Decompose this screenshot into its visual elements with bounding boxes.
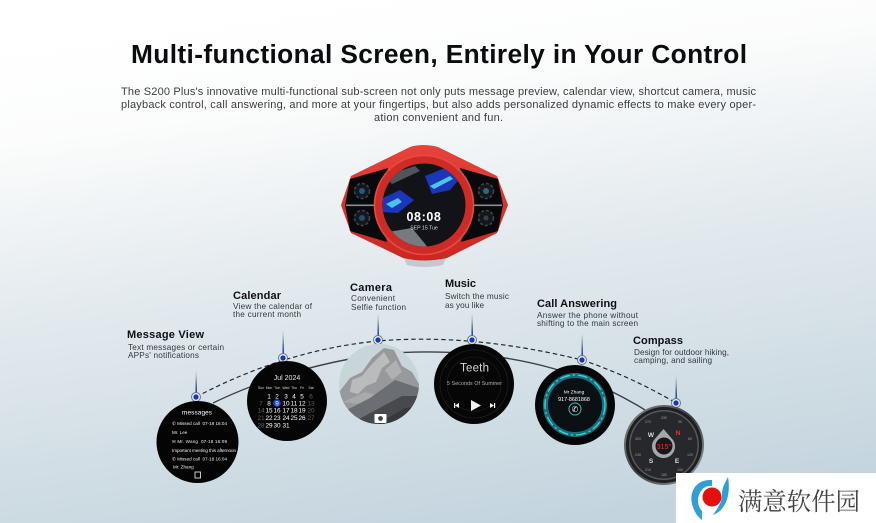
playback controls xyxy=(454,400,495,411)
watch face: compass: 30 xyxy=(678,420,682,424)
watch face: calendar: 9 xyxy=(275,400,279,408)
watch face: messages: Mr. Lee xyxy=(172,430,188,435)
watch face: calendar: Jul 2024 xyxy=(274,375,300,382)
watch face: calendar: Sat xyxy=(308,386,314,390)
watch face: compass: 150 xyxy=(677,468,683,472)
leader line xyxy=(196,370,197,397)
watch face: messages: messages xyxy=(182,410,212,416)
compass feature xyxy=(624,335,729,485)
watch face: calendar: 26 xyxy=(298,415,306,422)
music feature xyxy=(434,278,514,424)
watch face: calendar: 21 xyxy=(257,415,265,422)
music description: as you like xyxy=(445,301,484,310)
watch face: compass: 315° xyxy=(657,443,671,451)
right black panel xyxy=(460,168,503,242)
watch face: messages: ✆ Missed call 07-18 16:04 xyxy=(172,421,227,426)
camera description: Convenient xyxy=(351,294,396,303)
watch face: compass: E xyxy=(675,458,680,465)
intro text block xyxy=(121,86,756,124)
watch face: calendar: 4 xyxy=(292,394,296,400)
compass description xyxy=(634,348,729,365)
watch face: calendar: 22 xyxy=(265,415,273,422)
intro text block: ation convenient and fun. xyxy=(374,112,503,124)
watch face: calendar xyxy=(247,361,327,441)
leader line xyxy=(582,333,583,360)
watch face: calendar: 2 xyxy=(275,394,279,400)
music description xyxy=(445,292,509,310)
watch face: compass: 120 xyxy=(687,453,693,457)
watch face: calendar: 30 xyxy=(273,422,281,430)
message view description: APPs' notifications xyxy=(128,351,199,360)
leader line xyxy=(676,375,677,403)
intro text block: The S200 Plus's innovative multi-functional sub-screen not only puts message preview, calendar view, shortcut camera, music xyxy=(121,86,756,98)
anchor dot xyxy=(578,356,586,364)
watch face: calendar: 20 xyxy=(307,408,315,414)
watch face: calendar: 7 xyxy=(259,400,263,408)
watch face: calendar: 15 xyxy=(265,408,273,414)
watch face: compass: 210 xyxy=(645,468,651,472)
leader line xyxy=(282,330,284,358)
watch face: calendar: 16 xyxy=(273,408,281,414)
calendar description: the current month xyxy=(233,310,301,319)
watch face: calendar: 19 xyxy=(298,408,306,414)
watch face: compass: N xyxy=(676,430,681,437)
watch face: calendar: 24 xyxy=(282,415,290,422)
watch face: compass: 180 xyxy=(661,473,667,477)
watch face: calendar: 27 xyxy=(307,415,315,422)
call answering description: shifting to the main screen xyxy=(537,319,638,328)
watch face: calendar: 29 xyxy=(265,422,273,430)
camera shutter icon xyxy=(374,414,386,423)
compass description: Design for outdoor hiking, xyxy=(634,348,729,357)
watch face: calendar: 1 xyxy=(267,394,271,400)
button centers xyxy=(359,188,489,221)
watch face: calendar: Sun xyxy=(258,386,264,390)
buttons xyxy=(354,184,494,226)
watch face: calendar: 18 xyxy=(290,408,298,414)
calendar heading: Calendar xyxy=(233,290,282,302)
title: Multi-functional Screen, Entirely in Your Control xyxy=(131,39,747,69)
watch face: calendar: 23 xyxy=(273,415,281,422)
call answering description xyxy=(537,311,639,328)
call answering description: Answer the phone without xyxy=(537,311,639,320)
camera description xyxy=(351,294,406,312)
watch face: compass: S xyxy=(649,458,654,465)
music heading: Music xyxy=(445,278,476,290)
watch face: calendar: 13 xyxy=(307,400,315,408)
watch face: calendar: Thu xyxy=(291,386,297,390)
watch face: messages: ✆ Missed call 07-18 16:04 xyxy=(172,456,227,462)
device stand xyxy=(403,256,447,267)
device: red controller with sub-screen xyxy=(341,145,508,267)
watch face: messages: Important meeting this afternoon xyxy=(172,448,236,453)
watch face: compass: 240 xyxy=(635,453,641,457)
left black panel xyxy=(345,168,388,242)
watch face: vinyl music player: Teeth xyxy=(460,362,489,374)
watch face: compass: 270 xyxy=(645,420,651,424)
watch face: incoming call: ✆ xyxy=(572,405,579,414)
watch face: mountain photo xyxy=(339,344,419,424)
watch face: vinyl music player xyxy=(434,344,514,424)
call answering heading: Call Answering xyxy=(537,298,617,310)
calendar feature xyxy=(233,290,327,441)
message view description xyxy=(128,343,224,360)
watch face: compass: W xyxy=(648,432,655,439)
watch face: calendar: Wed xyxy=(283,386,290,390)
watch face: calendar: 8 xyxy=(267,400,271,408)
anchor dot xyxy=(672,398,680,408)
watch face: calendar: 6 xyxy=(309,394,313,400)
watch face: compass xyxy=(624,405,704,485)
watch face: calendar: Tue xyxy=(274,386,280,390)
camera description: Selfie function xyxy=(351,303,406,312)
anchor dot xyxy=(192,392,200,402)
anchor dot xyxy=(468,336,476,344)
watch face: calendar: 25 xyxy=(290,415,298,422)
watch face: calendar: 10 xyxy=(282,400,290,408)
screen clock: 08:08 xyxy=(407,210,441,224)
anchor dot xyxy=(278,354,288,362)
watch face: incoming call xyxy=(535,365,615,445)
watermark xyxy=(676,473,876,523)
bezel ring xyxy=(374,156,474,254)
watch face: compass: 330 xyxy=(661,416,667,420)
watch face: messages: Mr. Zhang xyxy=(173,464,194,470)
dashed arc xyxy=(196,339,676,403)
message view description: Text messages or certain xyxy=(128,343,224,352)
watch face: calendar: 5 xyxy=(300,394,304,400)
message view feature xyxy=(127,329,238,483)
watch face: incoming call: 917-8681868 xyxy=(558,397,590,403)
watch face: messages: ✉ Mr. Wang 07-18 16:09 xyxy=(172,439,227,444)
watch face: vinyl music player: 5 Seconds Of Summer xyxy=(447,381,502,387)
watermark logo xyxy=(691,477,729,520)
watch face: compass: 300 xyxy=(635,437,641,441)
screen xyxy=(382,164,466,246)
leader line xyxy=(472,313,473,340)
watch face: messages xyxy=(156,401,238,483)
watch face: compass: 60 xyxy=(688,437,692,441)
intro text block: playback control, call answering, and more at your fingertips, but also adds personalized dynamic effects to make every oper- xyxy=(121,99,756,111)
device body xyxy=(341,145,508,260)
compass heading: Compass xyxy=(633,335,683,347)
watch face: calendar: 14 xyxy=(257,408,265,414)
watch face: calendar: 12 xyxy=(298,400,306,408)
calendar description xyxy=(233,302,313,319)
camera feature xyxy=(339,282,419,424)
solid arc xyxy=(213,352,645,410)
watch face: calendar: 3 xyxy=(284,394,288,400)
music description: Switch the music xyxy=(445,292,509,301)
watch face: calendar: Fri xyxy=(300,386,304,390)
leader line xyxy=(378,313,379,340)
calendar description: View the calendar of xyxy=(233,302,313,311)
watch face: calendar: 28 xyxy=(257,422,265,430)
camera heading: Camera xyxy=(350,282,393,294)
call answering feature xyxy=(535,298,639,445)
compass description: camping, and sailing xyxy=(634,356,712,365)
message view heading: Message View xyxy=(127,329,204,341)
anchor dot xyxy=(374,336,382,344)
watch face: calendar: Mon xyxy=(266,386,272,390)
watch face: calendar: 11 xyxy=(291,400,298,408)
watermark text: 满意软件园 xyxy=(738,482,860,517)
watch face: incoming call: Mr Zhang xyxy=(564,390,585,396)
watch face: calendar: 31 xyxy=(282,422,290,430)
screen date: SEP 15 Tue xyxy=(410,226,438,232)
side seams xyxy=(346,204,502,206)
watch face: calendar: 17 xyxy=(282,408,290,414)
